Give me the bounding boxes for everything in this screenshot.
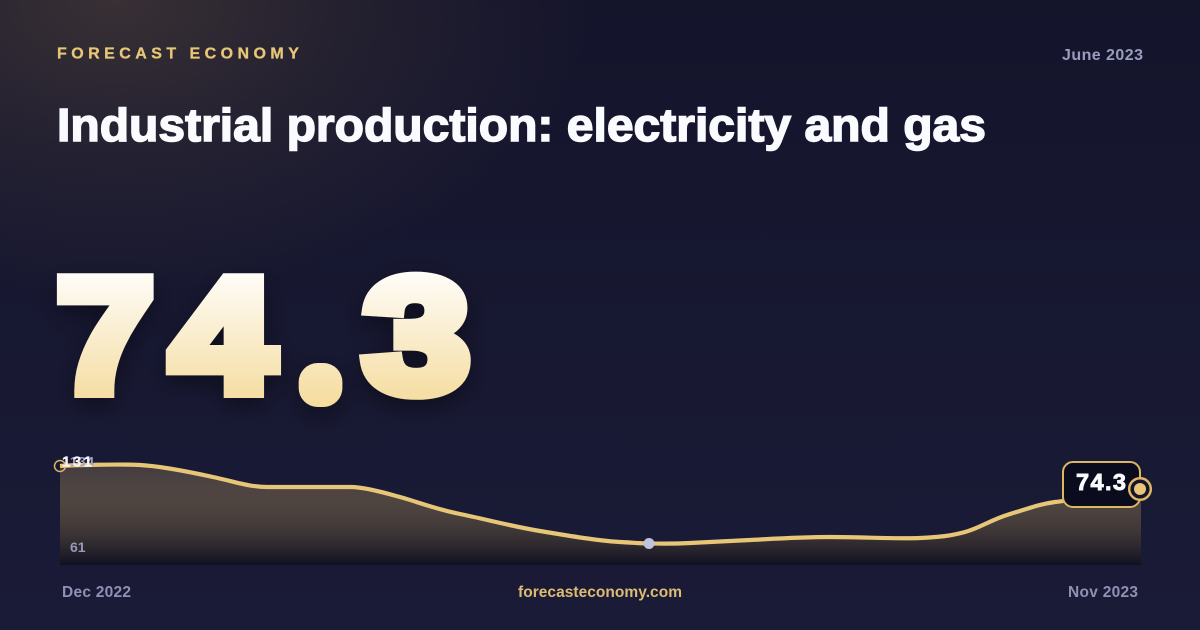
brand label: FORECAST ECONOMY bbox=[57, 46, 303, 62]
end marker bbox=[1129, 478, 1151, 500]
big value: 4 bbox=[171, 245, 274, 425]
trend line bbox=[60, 465, 1141, 544]
minimum marker bbox=[644, 538, 654, 549]
big value: 7 bbox=[57, 245, 154, 426]
value badge: 74.3 bbox=[1076, 469, 1126, 495]
sparkline chart bbox=[54, 454, 1151, 565]
date: June 2023 bbox=[1062, 47, 1143, 64]
end date: Nov 2023 bbox=[1068, 584, 1138, 601]
big value: 3 bbox=[364, 247, 469, 426]
big value: . bbox=[315, 353, 326, 397]
title: Industrial production: electricity and gas bbox=[57, 99, 986, 151]
min axis label: 61 bbox=[70, 539, 86, 555]
start marker bbox=[54, 460, 66, 472]
website: forecasteconomy.com bbox=[518, 584, 682, 601]
start date: Dec 2022 bbox=[62, 584, 131, 601]
start value: 131 bbox=[62, 454, 92, 470]
big value bbox=[57, 245, 469, 426]
max axis label: 134 bbox=[70, 454, 95, 469]
area fill bbox=[60, 465, 1141, 565]
value badge bbox=[1063, 462, 1140, 507]
